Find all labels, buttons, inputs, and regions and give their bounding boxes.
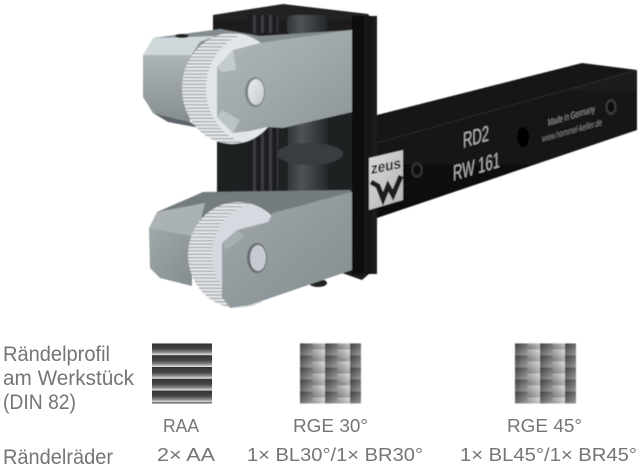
- upper holder front face: [217, 30, 352, 133]
- row heading: Rändelprofil am Werkstück (DIN 82): [3, 343, 134, 414]
- shank engraving: RW 161: RW 161: [453, 147, 500, 186]
- wheels: 2x AA: 2× AA: [157, 444, 216, 465]
- back plate: [213, 4, 377, 280]
- shank engraving: website: www.hommel-keller.de: [541, 117, 602, 145]
- row heading: Rändelprofil am Werkstück (DIN 82): am Werkstück: [3, 367, 134, 390]
- lower screw: [309, 279, 327, 287]
- wheels: BL30 BR30: 1× BL30°/1× BR30°: [247, 444, 423, 465]
- tool illustration: knurling tool holder: [143, 4, 637, 308]
- label: RAA: RAA: [163, 415, 200, 436]
- lower holder front face: [222, 192, 352, 308]
- upper pin: [245, 77, 265, 107]
- pattern: RGE 30: [300, 343, 361, 403]
- upper knurl wheel: [182, 32, 268, 145]
- upper knurl holder: [143, 29, 352, 144]
- row heading: Rändelprofil am Werkstück (DIN 82): (DIN 82): [3, 391, 76, 414]
- label: RGE 30: RGE 30°: [293, 415, 368, 436]
- lower knurl holder: [149, 190, 352, 308]
- shank engraving: Made in Germany: Made in Germany: [548, 104, 596, 129]
- label: RGE 45: RGE 45°: [507, 415, 582, 436]
- wheels: BL45 BR45: 1× BL45°/1× BR45°: [460, 444, 637, 465]
- centre mechanism: [217, 15, 352, 200]
- lower pin: [247, 243, 267, 273]
- shank: [377, 63, 637, 218]
- pattern: RAA: [152, 343, 212, 403]
- lower knurl wheel: [187, 201, 272, 308]
- zeus logo label: [369, 150, 403, 210]
- zeus logo label: zeus: [371, 155, 401, 178]
- shank screw holes: [411, 99, 616, 178]
- pattern: RGE 45: [515, 343, 576, 403]
- shank engraving: RD2: RD2: [463, 121, 489, 153]
- row heading: Rändelprofil am Werkstück (DIN 82): Rändelprofil: [3, 343, 110, 366]
